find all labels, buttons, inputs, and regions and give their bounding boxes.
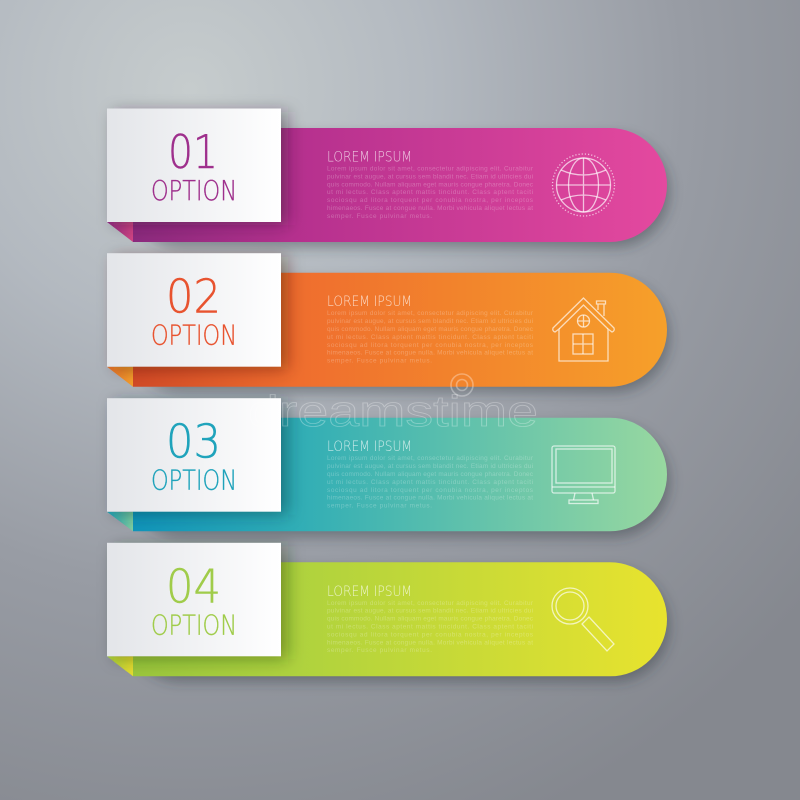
body text 02: pulvinar est augue, at cursus sem blandit nec. Etiam id ultricies dui	[327, 318, 533, 325]
card shadow 04	[114, 546, 288, 659]
icon: monitor	[552, 446, 615, 504]
number 02: 02	[166, 270, 221, 324]
card shadow 02	[114, 257, 288, 370]
body text 04: Lorem ipsum dolor sit amet, consectetur adipiscing elit. Curabitur	[327, 600, 534, 607]
watermark word: dreamstime	[248, 387, 538, 436]
heading 02: LOREM IPSUM	[327, 294, 412, 310]
body text 02	[327, 310, 534, 365]
card 01	[107, 108, 281, 222]
body text 01: ut mi lectus. Class aptent mattis tincidunt. Class aptent taciti	[327, 189, 533, 196]
body text 03	[327, 455, 534, 510]
label 04: OPTION	[151, 608, 237, 641]
band 01	[133, 128, 667, 242]
body text 03: quis commodo. Nullam aliquam eget mauris congue pharetra. Donec	[327, 471, 534, 478]
body text 01: quis commodo. Nullam aliquam eget mauris congue pharetra. Donec	[327, 181, 534, 188]
number 01: 01	[168, 125, 218, 179]
band shadow 03	[125, 425, 670, 538]
panel: option 03	[107, 398, 670, 538]
body text 03: himenaeos. Fusce at congue nulla. Morbi vehicula aliquet lectus at	[327, 495, 533, 502]
body text 01: semper. Fusce pulvinar metus.	[327, 213, 432, 220]
body text 01	[327, 166, 534, 220]
icon: magnifier	[552, 588, 614, 651]
body text 04: quis commodo. Nullam aliquam eget mauris congue pharetra. Donec	[327, 616, 534, 623]
fold 03	[107, 512, 133, 531]
watermark	[248, 374, 538, 436]
card shadow 03	[114, 402, 288, 515]
body text 04: pulvinar est augue, at cursus sem blandit nec. Etiam id ultricies dui	[327, 608, 533, 615]
body text 04	[327, 600, 534, 654]
fold 01	[107, 222, 133, 242]
label 03: OPTION	[151, 464, 237, 497]
card 02	[107, 253, 281, 367]
label 01: OPTION	[151, 174, 237, 207]
band 03	[133, 418, 667, 531]
card shadow 01	[114, 112, 288, 225]
body text 03: Lorem ipsum dolor sit amet, consectetur adipiscing elit. Curabitur	[327, 455, 534, 462]
label 02: OPTION	[151, 319, 237, 352]
heading 03: LOREM IPSUM	[327, 439, 412, 455]
band 04	[133, 562, 667, 676]
band shadow 04	[125, 569, 670, 682]
band shadow 01	[125, 135, 670, 248]
body text 01: Lorem ipsum dolor sit amet, consectetur adipiscing elit. Curabitur	[327, 166, 534, 172]
panel: option 02	[107, 253, 670, 393]
body text 01: sociosqu ad litora torquent per conubia nostra, per inceptos	[327, 197, 533, 204]
icon: house	[553, 298, 614, 361]
heading 04: LOREM IPSUM	[327, 584, 412, 600]
body text 03: sociosqu ad litora torquent per conubia nostra, per inceptos	[327, 487, 533, 494]
body text 04: sociosqu ad litora torquent per conubia nostra, per inceptos	[327, 631, 533, 638]
body text 02: himenaeos. Fusce at congue nulla. Morbi vehicula aliquet lectus at	[327, 350, 533, 357]
number 04: 04	[166, 559, 221, 613]
body text 04: himenaeos. Fusce at congue nulla. Morbi vehicula aliquet lectus at	[327, 639, 533, 646]
band 02	[133, 273, 667, 387]
fold 02	[107, 367, 133, 387]
heading 01: LOREM IPSUM	[327, 150, 412, 166]
body text 02: quis commodo. Nullam aliquam eget mauris congue pharetra. Donec	[327, 326, 534, 333]
body text 01: himenaeos. Fusce at congue nulla. Morbi vehicula aliquet lectus at	[327, 205, 533, 212]
panel: option 01	[107, 108, 670, 248]
body text 02: semper. Fusce pulvinar metus.	[327, 358, 432, 365]
band shadow 02	[125, 280, 670, 393]
panel: option 04	[107, 543, 670, 682]
icon: globe	[552, 154, 614, 216]
body text 02: sociosqu ad litora torquent per conubia nostra, per inceptos	[327, 342, 533, 349]
body text 03: semper. Fusce pulvinar metus.	[327, 503, 432, 510]
body text 04: semper. Fusce pulvinar metus.	[327, 647, 432, 654]
fold 04	[107, 656, 133, 676]
body text 03: ut mi lectus. Class aptent mattis tincidunt. Class aptent taciti	[327, 479, 533, 486]
body text 03: pulvinar est augue, at cursus sem blandit nec. Etiam id ultricies dui	[327, 463, 533, 470]
body text 02: ut mi lectus. Class aptent mattis tincidunt. Class aptent taciti	[327, 334, 533, 341]
body text 02: Lorem ipsum dolor sit amet, consectetur adipiscing elit. Curabitur	[327, 310, 534, 317]
body text 01: pulvinar est augue, at cursus sem blandit nec. Etiam id ultricies dui	[327, 173, 533, 180]
card 03	[107, 398, 281, 512]
card 04	[107, 543, 281, 656]
watermark spiral	[451, 374, 473, 396]
number 03: 03	[166, 415, 221, 469]
body text 04: ut mi lectus. Class aptent mattis tincidunt. Class aptent taciti	[327, 623, 533, 630]
